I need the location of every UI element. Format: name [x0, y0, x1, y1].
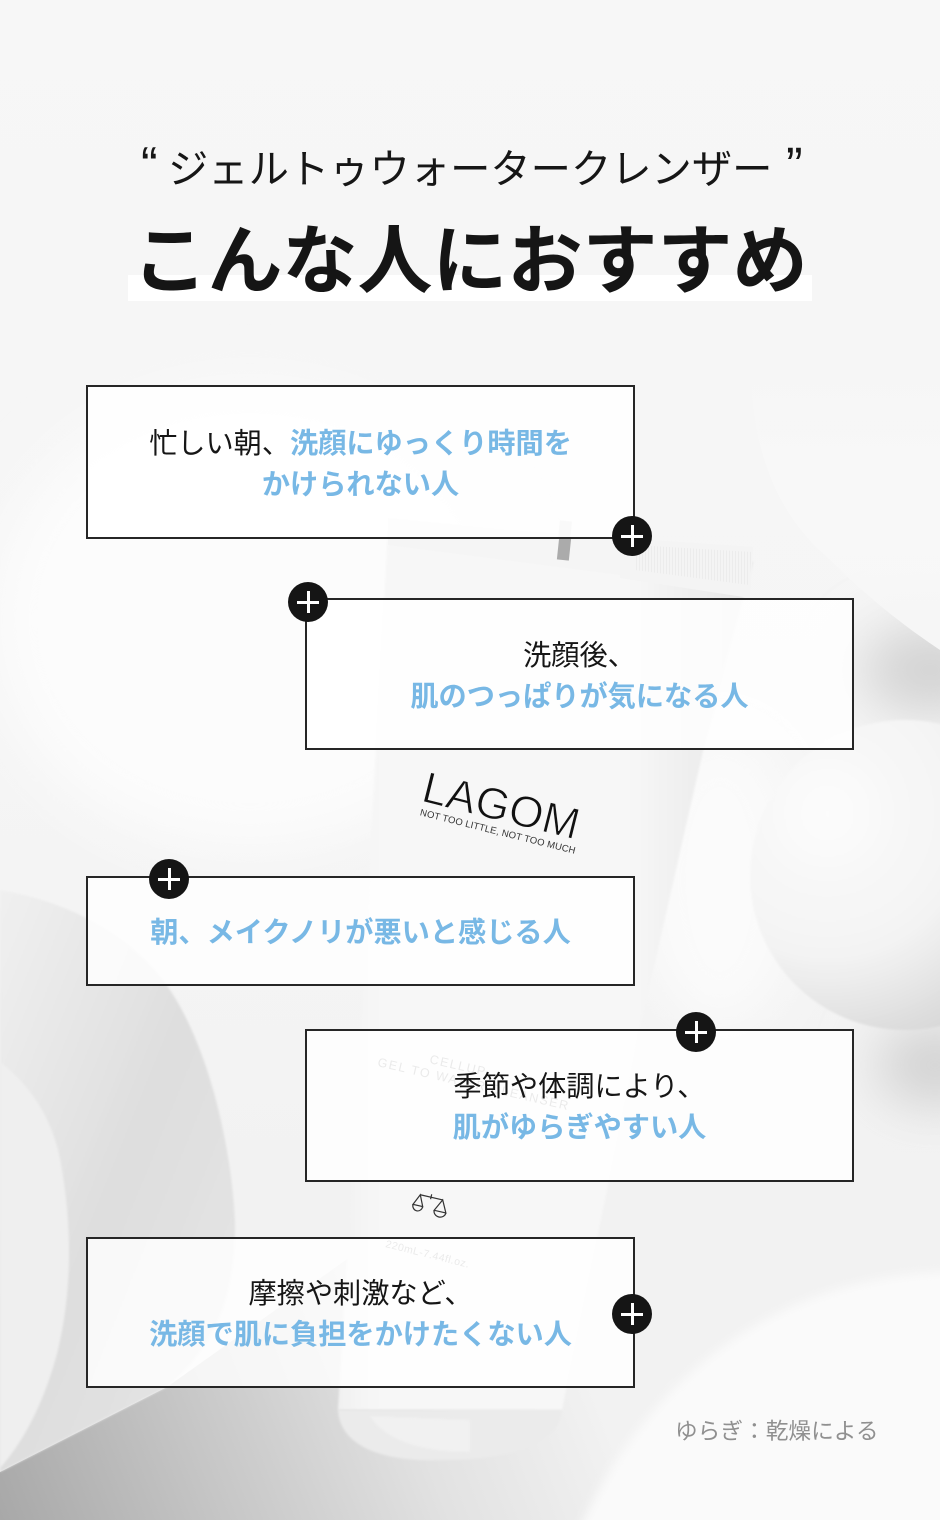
text: recommendation 2: 洗顔後、 [523, 639, 636, 671]
outer paper roll [0, 890, 235, 1472]
text: recommendation 1: 忙しい朝、洗顔にゆっくり時間を [149, 427, 572, 459]
icon: plus 5 [612, 1294, 652, 1334]
text: recommendation 5: 摩擦や刺激など、 [248, 1277, 473, 1309]
panel: recommendation 1 [86, 385, 635, 539]
icon: balance scale [411, 1191, 449, 1218]
right side shadow behind sphere [860, 625, 940, 715]
large flat plane lower left [0, 1250, 940, 1520]
text: recommendation 4 [453, 1070, 706, 1143]
product label: small text [376, 1052, 571, 1271]
title: こんな人におすすめ [132, 219, 808, 303]
panel: recommendation 5 [86, 1237, 635, 1388]
icon: product tube [338, 518, 753, 1460]
text: recommendation 3: 朝、メイクノリが悪いと感じる人 [150, 916, 571, 948]
panel: recommendation 3 [86, 876, 635, 986]
panel: recommendation 4 [305, 1029, 854, 1182]
inner paper roll [0, 1062, 69, 1468]
icon: plus 4 [676, 1012, 716, 1052]
heading: product name: ジェルトゥウォータークレンザー [168, 147, 772, 192]
icon: plus 2 [288, 582, 328, 622]
text: recommendation 5: 洗顔で肌に負担をかけたくない人 [149, 1318, 572, 1350]
text: recommendation 5 [149, 1277, 572, 1350]
sphere right [750, 720, 940, 1030]
panel: recommendation 2 [305, 598, 854, 750]
product label: small text: 220mL-7.44fl.oz. [384, 1238, 471, 1271]
icon: plus 1 [612, 516, 652, 556]
footnote: ゆらぎ：乾燥による [675, 1418, 879, 1444]
text: recommendation 4: 季節や体調により、 [454, 1070, 706, 1102]
heading: product name: “ [141, 137, 158, 193]
text: recommendation 2: 肌のつっぱりが気になる人 [410, 680, 749, 712]
product label: small text: GEL TO WATER CLEANSER [376, 1055, 571, 1113]
logo: LAGOM: NOT TOO LITTLE, NOT TOO MUCH [419, 807, 577, 857]
text: recommendation 4: 肌がゆらぎやすい人 [453, 1111, 706, 1143]
heading highlight band [128, 275, 812, 301]
white plane lower right [575, 1272, 940, 1520]
text: recommendation 2 [410, 639, 749, 712]
top right curved plane [751, 340, 940, 650]
logo: LAGOM: LAGOM [418, 763, 585, 849]
text: recommendation 1 [149, 427, 572, 500]
heading: product name: ” [786, 137, 803, 193]
icon: plus 3 [149, 859, 189, 899]
product label: small text: CELLUP [428, 1052, 488, 1079]
icon: tube tab [557, 520, 572, 561]
text: recommendation 1: かけられない人 [262, 468, 459, 500]
